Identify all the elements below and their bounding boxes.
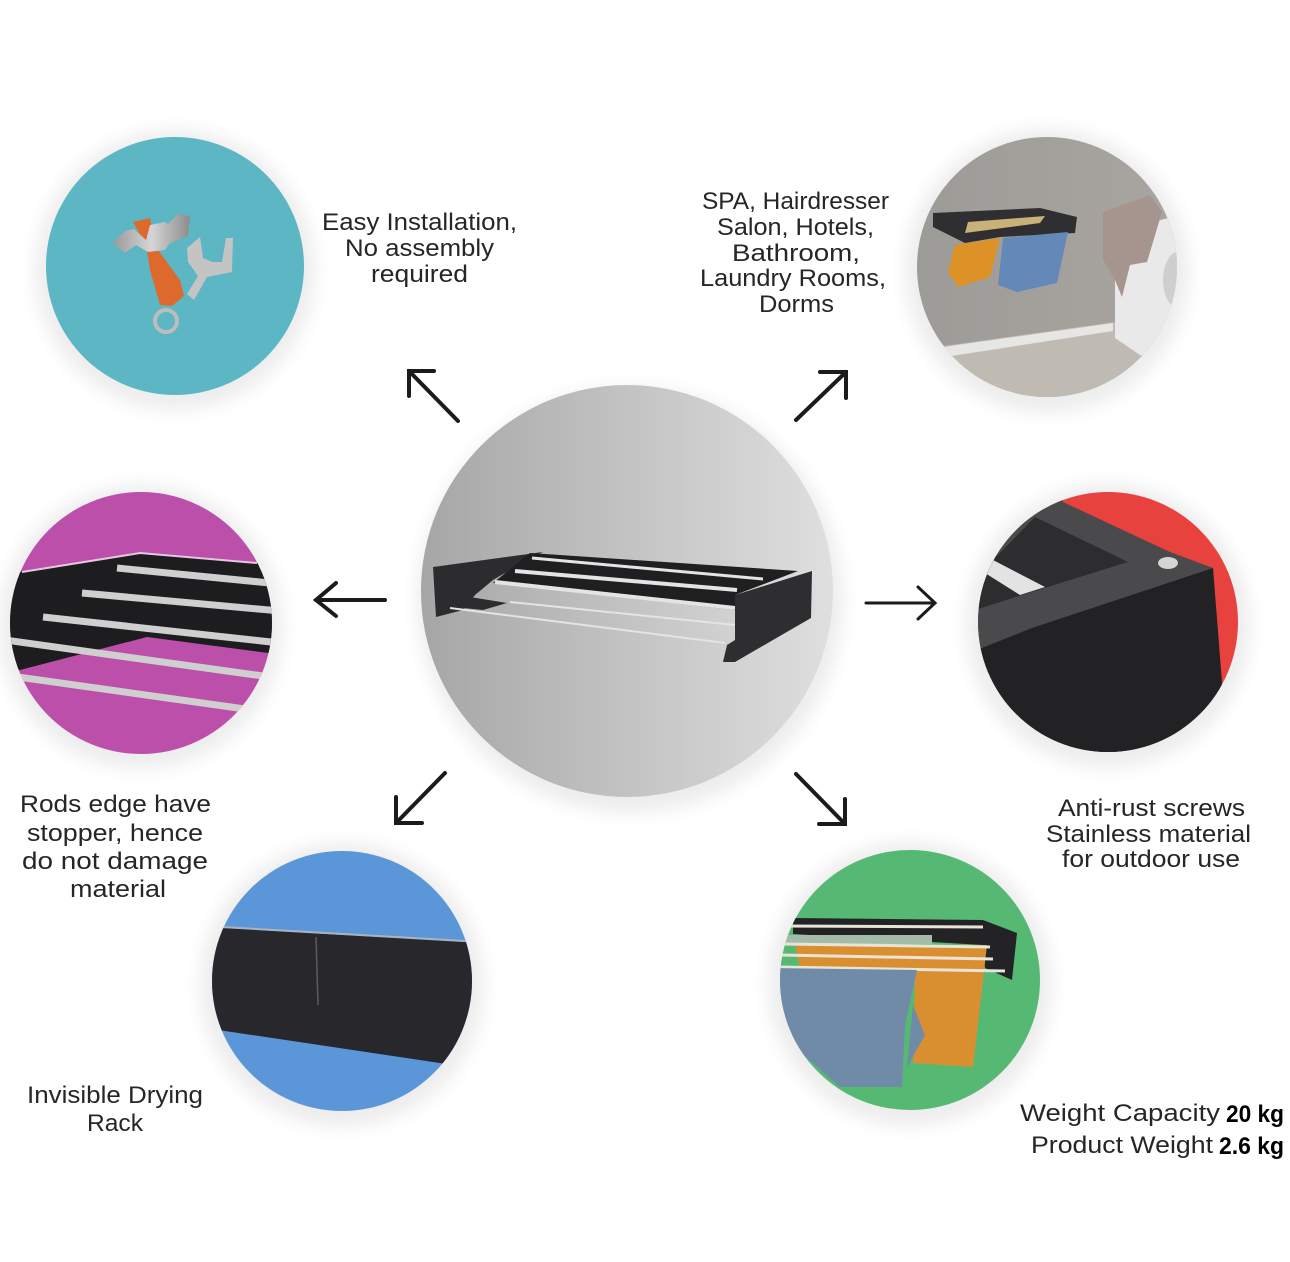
text: weight: Product Weight <box>1031 1132 1213 1159</box>
text: screws: Stainless material <box>1046 821 1251 848</box>
text: use locations: SPA, Hairdresser <box>702 188 889 215</box>
text: weight: Weight Capacity <box>1020 1100 1220 1127</box>
text: invisible rack: Rack <box>87 1110 144 1137</box>
panel: easy installation <box>35 130 315 410</box>
text: invisible rack: Invisible Drying <box>27 1082 203 1109</box>
panel: invisible rack <box>200 843 484 1127</box>
panel: central rack <box>417 385 843 813</box>
panel: weight capacity <box>768 842 1052 1126</box>
text: use locations: Dorms <box>759 291 834 318</box>
arrow: right <box>866 587 935 619</box>
text: invisible rack <box>27 1082 203 1137</box>
text: weight: 20 kg <box>1226 1101 1284 1128</box>
panel: rods <box>0 485 283 769</box>
text: rods: material <box>70 876 166 903</box>
rack photo <box>933 208 1077 292</box>
arrow: up right <box>796 372 846 420</box>
arrow: down right <box>796 774 845 824</box>
text: easy installation: Easy Installation, <box>322 209 517 236</box>
text: use locations: Bathroom, <box>732 240 860 267</box>
arrow: up left <box>409 371 458 421</box>
panel: screws <box>966 484 1250 770</box>
arrow: down left <box>396 773 445 823</box>
text: weight <box>1020 1100 1284 1160</box>
icon: hammer and wrench tools <box>113 214 233 332</box>
text: rods: Rods edge have <box>20 791 211 818</box>
text: easy installation <box>322 209 517 288</box>
text: screws <box>1046 795 1251 873</box>
text: use locations: Laundry Rooms, <box>700 265 886 292</box>
text: rods <box>20 791 211 903</box>
text: easy installation: required <box>371 261 468 288</box>
arrow: left <box>316 583 385 616</box>
text: easy installation: No assembly <box>345 235 494 262</box>
text: rods: do not damage <box>22 848 208 875</box>
rack product <box>433 552 812 662</box>
text: use locations: Salon, Hotels, <box>717 214 874 241</box>
text: weight: 2.6 kg <box>1219 1133 1284 1160</box>
panel: use locations <box>905 129 1193 413</box>
text: use locations <box>700 188 889 318</box>
text: rods: stopper, hence <box>27 820 203 847</box>
text: screws: Anti-rust screws <box>1058 795 1245 822</box>
text: screws: for outdoor use <box>1062 846 1240 873</box>
